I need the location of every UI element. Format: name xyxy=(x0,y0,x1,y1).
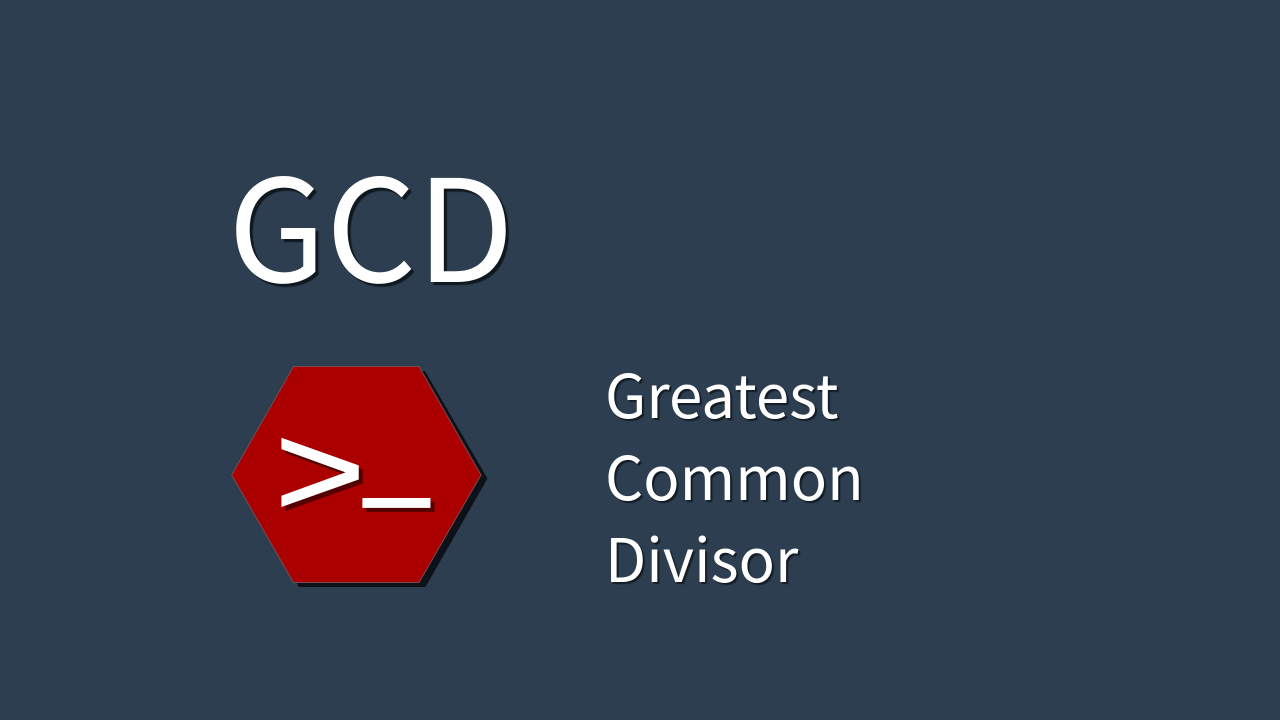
text block: Greatest Common Divisor xyxy=(605,349,864,600)
icon: red hexagon terminal prompt: > xyxy=(278,400,370,548)
title: GCD: GCD xyxy=(228,117,514,323)
icon: red hexagon terminal prompt: _ xyxy=(368,387,434,512)
icon: red hexagon terminal prompt: _ xyxy=(364,383,430,508)
text block: Greatest Common Divisor: Common xyxy=(605,431,864,518)
icon: red hexagon terminal prompt: > xyxy=(274,396,366,544)
text block: Greatest Common Divisor: Greatest xyxy=(605,349,838,436)
text block: Greatest Common Divisor: Divisor xyxy=(605,513,798,600)
